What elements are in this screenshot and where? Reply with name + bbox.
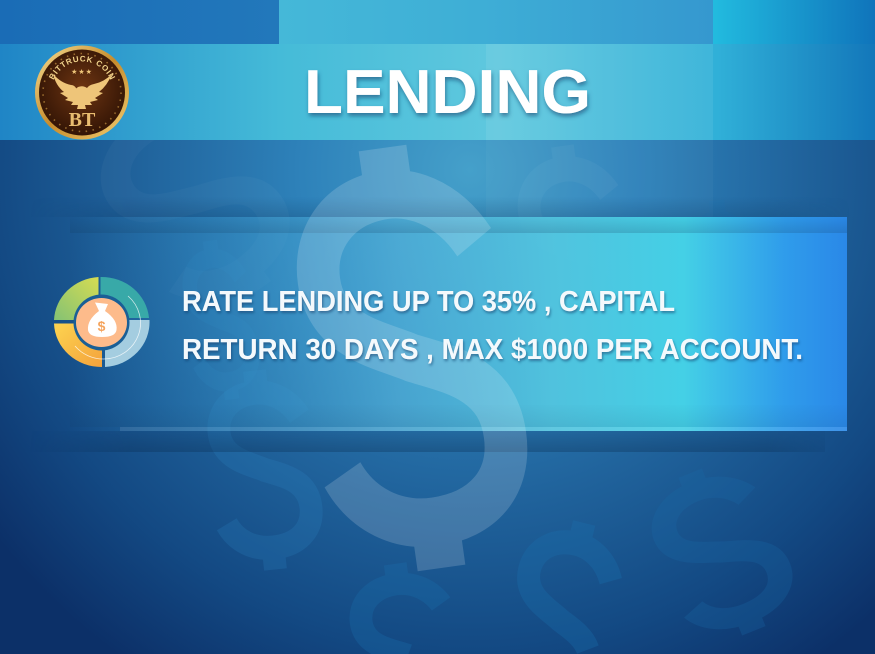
centre ring	[74, 294, 130, 350]
lending text	[182, 286, 803, 366]
money bag	[88, 302, 117, 337]
logo stars: ★★★	[71, 68, 93, 76]
logo monogram: BT	[69, 109, 96, 131]
header band	[0, 44, 875, 217]
line 2: RETURN 30 DAYS , MAX $1000 PER ACCOUNT.	[182, 334, 803, 366]
title: LENDING	[304, 58, 591, 127]
central dollar sign	[298, 137, 522, 580]
green segment	[54, 277, 98, 320]
light blue segment	[105, 320, 150, 367]
logo eagle	[53, 74, 112, 109]
icon: money bag pie	[54, 277, 150, 367]
decorative ring	[75, 296, 141, 359]
teal segment	[100, 277, 149, 318]
top strip	[0, 0, 875, 44]
centre disc	[76, 298, 127, 347]
logo: Bittruck coin	[35, 46, 129, 140]
background dollar watermarks	[208, 198, 792, 654]
line 1: RATE LENDING UP TO 35% , CAPITAL	[182, 286, 675, 318]
text panel	[70, 217, 847, 431]
dollar glyph: $	[98, 318, 106, 334]
yellow segment	[54, 324, 102, 367]
panel shadows	[76, 203, 815, 452]
logo name: BITTRUCK COIN	[48, 56, 116, 80]
